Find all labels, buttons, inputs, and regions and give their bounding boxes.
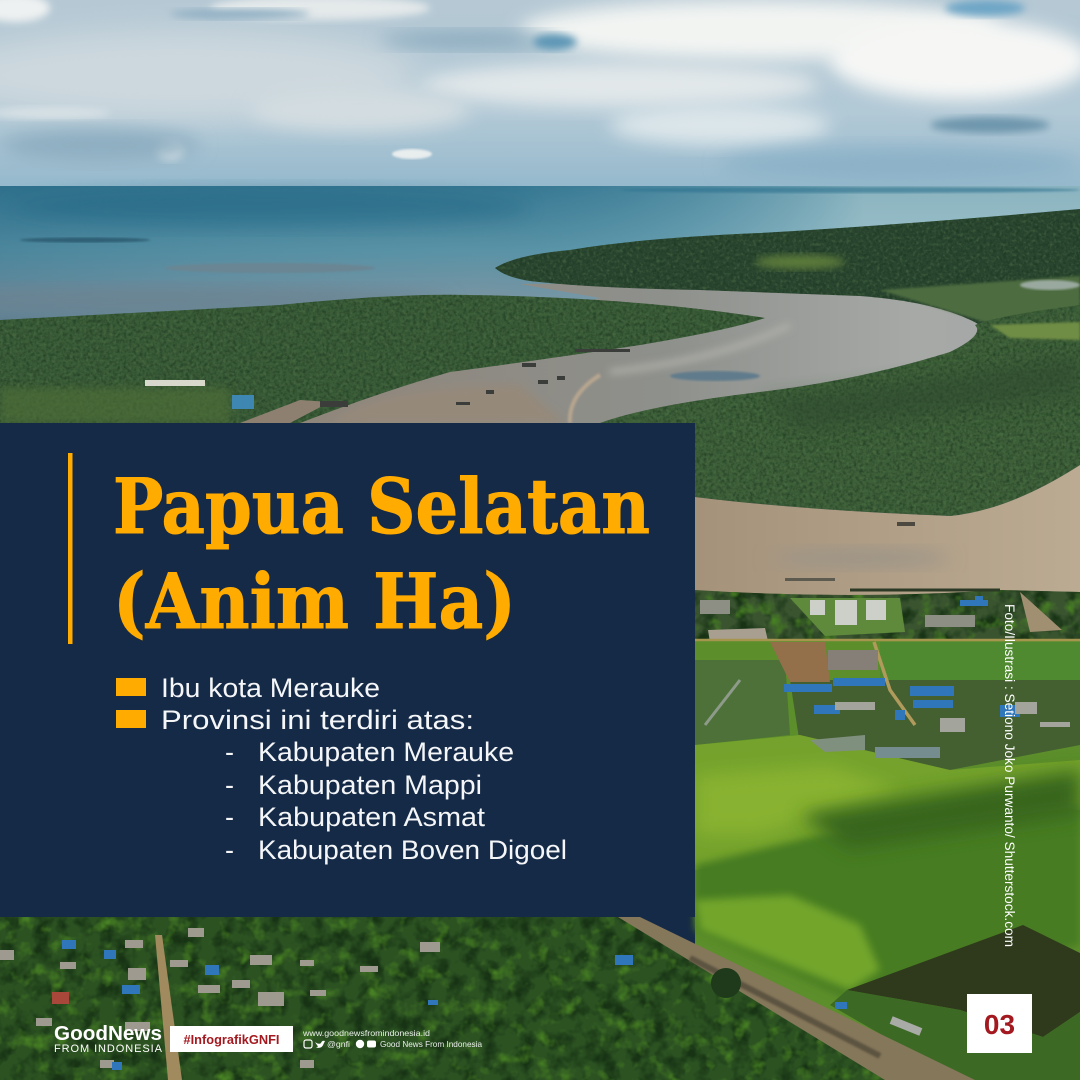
footer logo: GoodNews from Indonesia bbox=[54, 1023, 163, 1055]
list item: provinces intro: Provinsi ini terdiri atas: bbox=[161, 705, 474, 735]
title bbox=[113, 462, 650, 646]
lower river bbox=[695, 465, 1080, 600]
sub-list of regencies: Kabupaten Asmat bbox=[258, 802, 486, 832]
icon: instagram bbox=[304, 1040, 312, 1048]
hashtag label bbox=[170, 1026, 293, 1052]
right forest bbox=[600, 305, 1080, 516]
bullet marker 1 bbox=[116, 678, 146, 696]
hashtag label: #InfografikGNFI bbox=[184, 1033, 280, 1047]
footer contact details and social icons bbox=[302, 1028, 482, 1049]
sea bbox=[0, 186, 1080, 346]
icon: youtube bbox=[367, 1040, 376, 1048]
list item: capital: Ibu kota Merauke bbox=[161, 673, 380, 703]
sub-list of regencies: - bbox=[225, 835, 234, 865]
upper river bbox=[250, 280, 1080, 430]
sub-list of regencies: - bbox=[225, 770, 234, 800]
sub-list of regencies: - bbox=[225, 802, 234, 832]
icon: twitter bbox=[315, 1041, 325, 1048]
left forest peninsula bbox=[0, 295, 765, 423]
sub-list of regencies bbox=[225, 737, 567, 865]
photo credit: Foto/Ilustrasi : Setiono Joko Purwanto/ Shutterstock.com bbox=[1002, 604, 1017, 947]
bullet list bbox=[116, 673, 567, 865]
page number badge: 03 bbox=[984, 1009, 1015, 1040]
title: (Anim Ha) bbox=[113, 557, 516, 646]
footer contact details and social icons: @gnfi bbox=[327, 1039, 350, 1049]
sub-list of regencies: Kabupaten Mappi bbox=[258, 770, 482, 800]
sub-list of regencies: Kabupaten Boven Digoel bbox=[258, 835, 567, 865]
title: Papua Selatan bbox=[113, 462, 650, 551]
panel: title and details bbox=[0, 423, 695, 917]
green fields bbox=[695, 640, 1080, 1080]
footer logo: GoodNews from Indonesia: GoodNews bbox=[54, 1023, 162, 1045]
sub-list of regencies: Kabupaten Merauke bbox=[258, 737, 514, 767]
bullet marker 2 bbox=[116, 710, 146, 728]
icon: facebook bbox=[356, 1040, 364, 1048]
footer contact details and social icons: www.goodnewsfromindonesia.id bbox=[302, 1028, 430, 1038]
sky with clouds bbox=[0, 0, 1080, 190]
settlement bbox=[695, 578, 1080, 655]
far peninsula bbox=[495, 209, 1080, 325]
bottom village strip bbox=[0, 917, 975, 1080]
footer contact details and social icons: Good News From Indonesia bbox=[380, 1039, 482, 1049]
sub-list of regencies: - bbox=[225, 737, 234, 767]
footer logo: GoodNews from Indonesia: FROM INDONESIA bbox=[54, 1043, 163, 1055]
page number badge bbox=[967, 994, 1032, 1053]
accent bar bbox=[68, 453, 72, 644]
